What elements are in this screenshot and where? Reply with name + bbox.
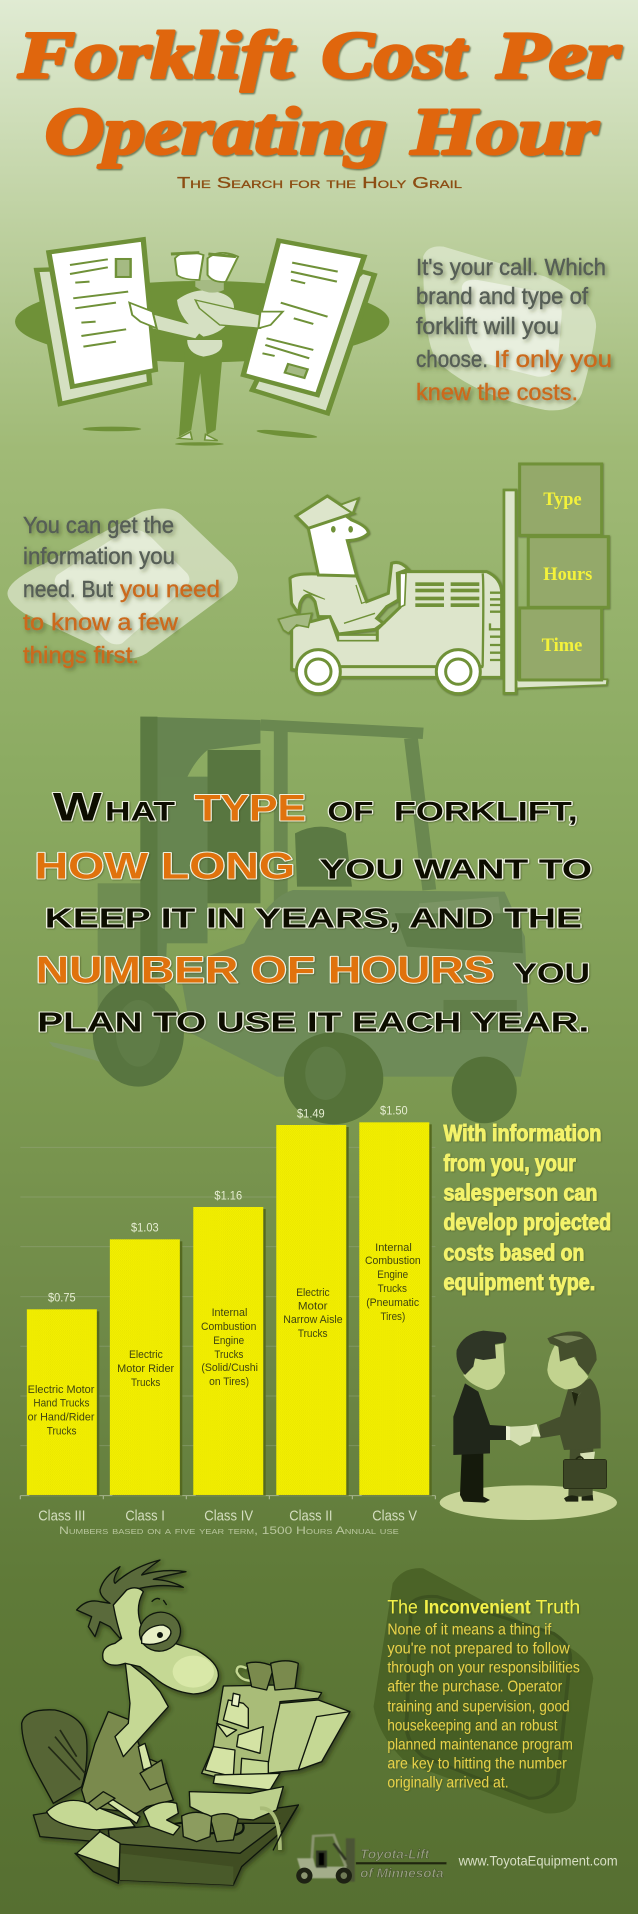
text: you can get the information: to know a few bbox=[23, 609, 178, 635]
axis labels: Class I bbox=[125, 1508, 165, 1524]
icon: coffee cups on monitor bbox=[237, 1661, 298, 1690]
illustration: cartoon forklift with boxes bbox=[278, 464, 608, 694]
body bbox=[292, 572, 502, 677]
line 5: PLAN TO USE IT EACH YEAR. bbox=[37, 1007, 589, 1038]
illustration: two-headed man comparing documents bbox=[15, 239, 389, 446]
axis labels: Class II bbox=[289, 1508, 332, 1524]
text: your call bbox=[416, 254, 612, 405]
bar: class III bbox=[27, 1291, 97, 1495]
icon: left documents bbox=[37, 239, 155, 404]
text: you can get the information: you need bbox=[120, 576, 220, 602]
bar: class IV bbox=[193, 1189, 263, 1495]
bar: class IV: on Tires) bbox=[209, 1375, 249, 1388]
bar: class II: Narrow Aisle bbox=[283, 1313, 343, 1326]
illustration: handshake bbox=[440, 1331, 617, 1520]
bar: class II bbox=[276, 1107, 346, 1495]
text: you can get the information: things first. bbox=[23, 642, 139, 668]
line 1: OF bbox=[328, 797, 374, 827]
blob behind text bbox=[423, 246, 596, 410]
driver bbox=[278, 496, 408, 634]
title: Operating bbox=[45, 95, 387, 169]
bar: class I: $1.03 bbox=[131, 1221, 159, 1234]
heading: Inconvenient bbox=[424, 1595, 531, 1618]
chart footnote: Numbers based on a five year term, 1500 Hours Annual use bbox=[59, 1524, 399, 1537]
logo: small forklift bbox=[296, 1835, 355, 1884]
text: you can get the information: information you bbox=[23, 543, 175, 569]
text: your call: If only you bbox=[494, 346, 612, 372]
right salesman bbox=[527, 1331, 607, 1502]
body: are key to hitting the number bbox=[387, 1755, 567, 1772]
box: type: Type bbox=[543, 489, 582, 510]
body: housekeeping and an robust bbox=[387, 1717, 558, 1734]
bar: class II: Electric bbox=[296, 1286, 330, 1299]
dark blob behind text bbox=[374, 1568, 593, 1813]
logo: Toyota-Lift of Minnesota bbox=[356, 1847, 446, 1880]
line 2 bbox=[35, 845, 592, 886]
blob behind text 2 bbox=[7, 508, 238, 658]
body: training and supervision, good bbox=[387, 1698, 570, 1715]
bar: class II: Trucks bbox=[298, 1327, 328, 1340]
body bbox=[387, 1621, 580, 1791]
icon: right documents bbox=[243, 241, 374, 413]
bar: class V: (Pneumatic bbox=[366, 1296, 419, 1309]
left salesman bbox=[453, 1331, 535, 1503]
background forklift photo silhouette bbox=[49, 717, 529, 1124]
title: Forklift bbox=[17, 19, 296, 93]
logo: Toyota-Lift of Minnesota: Toyota-Lift bbox=[360, 1847, 431, 1861]
body: originally arrived at. bbox=[387, 1774, 509, 1791]
text: the inconvenient truth bbox=[387, 1595, 580, 1791]
text: you can get the information bbox=[23, 512, 220, 668]
bar: class IV: $1.16 bbox=[214, 1189, 242, 1202]
body: you're not prepared to follow bbox=[387, 1640, 570, 1657]
body bbox=[47, 1712, 180, 1883]
line 1: FORKLIFT, bbox=[394, 797, 578, 827]
bar: class V bbox=[359, 1104, 429, 1495]
line 2: HOW LONG bbox=[35, 845, 295, 886]
chair bbox=[22, 1710, 100, 1842]
axis labels: Class V bbox=[372, 1508, 417, 1524]
text: your call: brand and type of bbox=[416, 283, 589, 309]
bar: class V: Combustion bbox=[365, 1254, 421, 1267]
bar: class III: Hand Trucks bbox=[33, 1397, 90, 1409]
bar: class IV: Trucks bbox=[214, 1348, 243, 1361]
line 2: YOU WANT TO bbox=[319, 853, 592, 885]
box: hours bbox=[528, 537, 608, 607]
bar: class I: Motor Rider bbox=[117, 1362, 174, 1375]
title bbox=[17, 19, 622, 169]
bar: class I: Electric bbox=[129, 1348, 163, 1361]
bar: class IV: Combustion bbox=[201, 1320, 256, 1333]
axis labels bbox=[38, 1508, 417, 1524]
box: type bbox=[520, 464, 602, 535]
text: with information from you bbox=[444, 1121, 611, 1295]
line 1 bbox=[53, 786, 578, 830]
text: your call: choose. bbox=[416, 346, 488, 372]
subtitle: The Search for the Holy Grail bbox=[177, 175, 462, 192]
logo: Toyota-Lift of Minnesota: of Minnesota bbox=[360, 1866, 444, 1880]
bar: class V: $1.50 bbox=[380, 1104, 408, 1117]
text: your call: It's your call. Which bbox=[416, 254, 606, 280]
bar: class II: Motor bbox=[298, 1299, 328, 1312]
bar: class III: $0.75 bbox=[48, 1291, 76, 1304]
title: Hour bbox=[410, 95, 599, 169]
bar: class V: Internal bbox=[375, 1241, 412, 1254]
icon: man bbox=[129, 252, 283, 441]
text: your call: forklift will you bbox=[416, 313, 559, 339]
box: time: Time bbox=[542, 635, 582, 656]
ground shadows bbox=[83, 427, 318, 446]
text: with information from you: from you, your bbox=[444, 1151, 576, 1176]
box: time bbox=[520, 608, 602, 680]
wheels bbox=[296, 650, 480, 694]
desk bbox=[108, 1805, 298, 1885]
bar: class IV: Engine bbox=[213, 1334, 244, 1347]
bar: class V: Trucks bbox=[378, 1282, 407, 1295]
bar: class IV: (Solid/Cushi bbox=[201, 1361, 258, 1374]
bar: class V: Engine bbox=[377, 1268, 408, 1281]
bold question statement bbox=[35, 786, 592, 1038]
line 4: NUMBER OF HOURS bbox=[36, 949, 494, 991]
body: planned maintenance program bbox=[387, 1736, 573, 1753]
text: you can get the information: need. But bbox=[23, 576, 114, 602]
axis labels: Class III bbox=[38, 1508, 85, 1524]
bar: class V: Tires) bbox=[380, 1310, 405, 1323]
icon: coffee cups on desk bbox=[182, 1812, 244, 1842]
icon: computer bbox=[189, 1685, 350, 1850]
heading: Truth bbox=[535, 1595, 580, 1618]
line 1: HAT bbox=[105, 797, 175, 827]
title: Per bbox=[495, 19, 622, 93]
axis labels: Class IV bbox=[204, 1508, 253, 1524]
box: hours: Hours bbox=[543, 564, 592, 585]
body: after the purchase. Operator bbox=[387, 1678, 563, 1695]
line 4: YOU bbox=[514, 958, 590, 989]
bar chart bbox=[20, 1104, 435, 1537]
bar: class III: Electric Motor bbox=[28, 1383, 94, 1396]
bar: class II: $1.49 bbox=[297, 1107, 325, 1120]
heading: The bbox=[387, 1595, 418, 1618]
bar: class III: or Hand/Rider bbox=[28, 1411, 94, 1423]
text: you can get the information: You can get the bbox=[23, 512, 174, 538]
line 3: KEEP IT IN YEARS, AND THE bbox=[45, 903, 582, 934]
head and neck bbox=[77, 1560, 218, 1757]
line 1: TYPE bbox=[194, 787, 306, 829]
bar: class I: Trucks bbox=[131, 1376, 160, 1389]
body: None of it means a thing if bbox=[387, 1621, 552, 1638]
bar: class I bbox=[110, 1221, 180, 1495]
bar: class III: Trucks bbox=[47, 1425, 76, 1437]
bar: class IV: Internal bbox=[212, 1306, 247, 1319]
title: Cost bbox=[321, 19, 468, 93]
line 1: W bbox=[53, 786, 103, 830]
text: your call: knew the costs. bbox=[416, 379, 578, 405]
illustration: stressed man at computer bbox=[22, 1560, 350, 1885]
